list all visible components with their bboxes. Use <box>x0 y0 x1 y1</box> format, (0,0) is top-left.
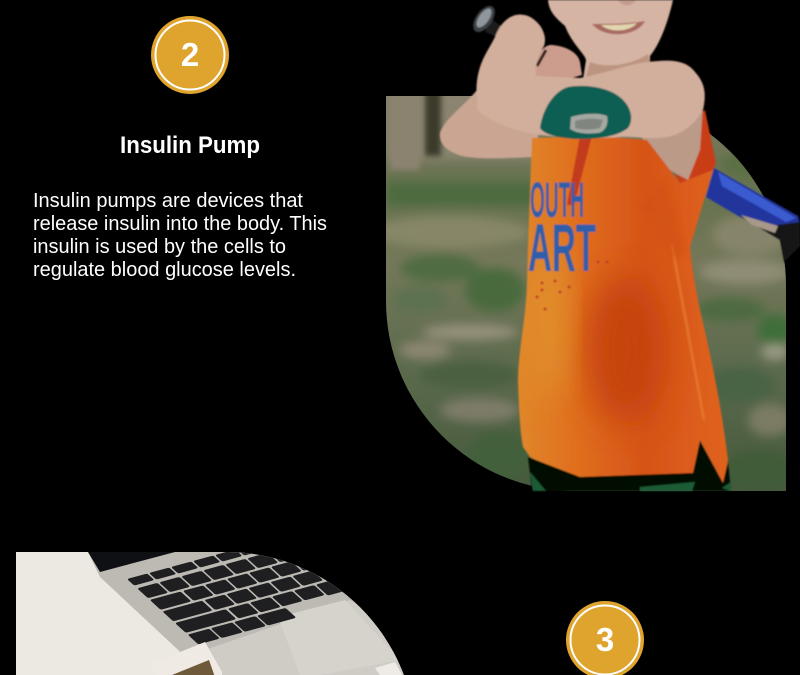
photo: boy swinging a bat, with sensor on arm <box>440 0 800 495</box>
step number badge 2 <box>151 16 229 94</box>
description text: insulin is used by the cells to <box>33 236 286 258</box>
orange shirt <box>517 136 729 484</box>
orange shirt: OUTH <box>530 172 584 228</box>
laptop body <box>88 552 420 675</box>
description text: regulate blood glucose levels. <box>33 259 296 281</box>
step number badge 3: 3 <box>596 621 614 658</box>
shirt star dots <box>536 260 608 310</box>
step number badge 3 <box>566 601 644 675</box>
palm rest and trackpad <box>205 600 420 675</box>
panel: laptop photo with pump device <box>16 552 404 675</box>
face and neck <box>548 0 673 80</box>
orange shirt: ART <box>528 210 596 286</box>
step number badge 2: 2 <box>181 36 199 73</box>
description text: Insulin pumps are devices that <box>33 190 303 212</box>
baseball bat <box>469 2 800 262</box>
lower arm behind <box>440 90 540 158</box>
heading: Insulin Pump: Insulin Pump <box>120 132 260 159</box>
panel: photo background of grass and trees <box>370 90 795 491</box>
shirt lettering <box>528 181 597 272</box>
shoulder skin under arm <box>640 105 703 180</box>
description text: release insulin into the body. This <box>33 213 327 235</box>
keyboard keys <box>128 552 342 644</box>
insulin pump device <box>172 642 222 675</box>
green sensor patch <box>540 86 631 139</box>
shirt strap <box>660 110 716 185</box>
shorts <box>528 441 731 491</box>
description text <box>33 190 327 281</box>
raised arm and hand <box>476 14 705 138</box>
